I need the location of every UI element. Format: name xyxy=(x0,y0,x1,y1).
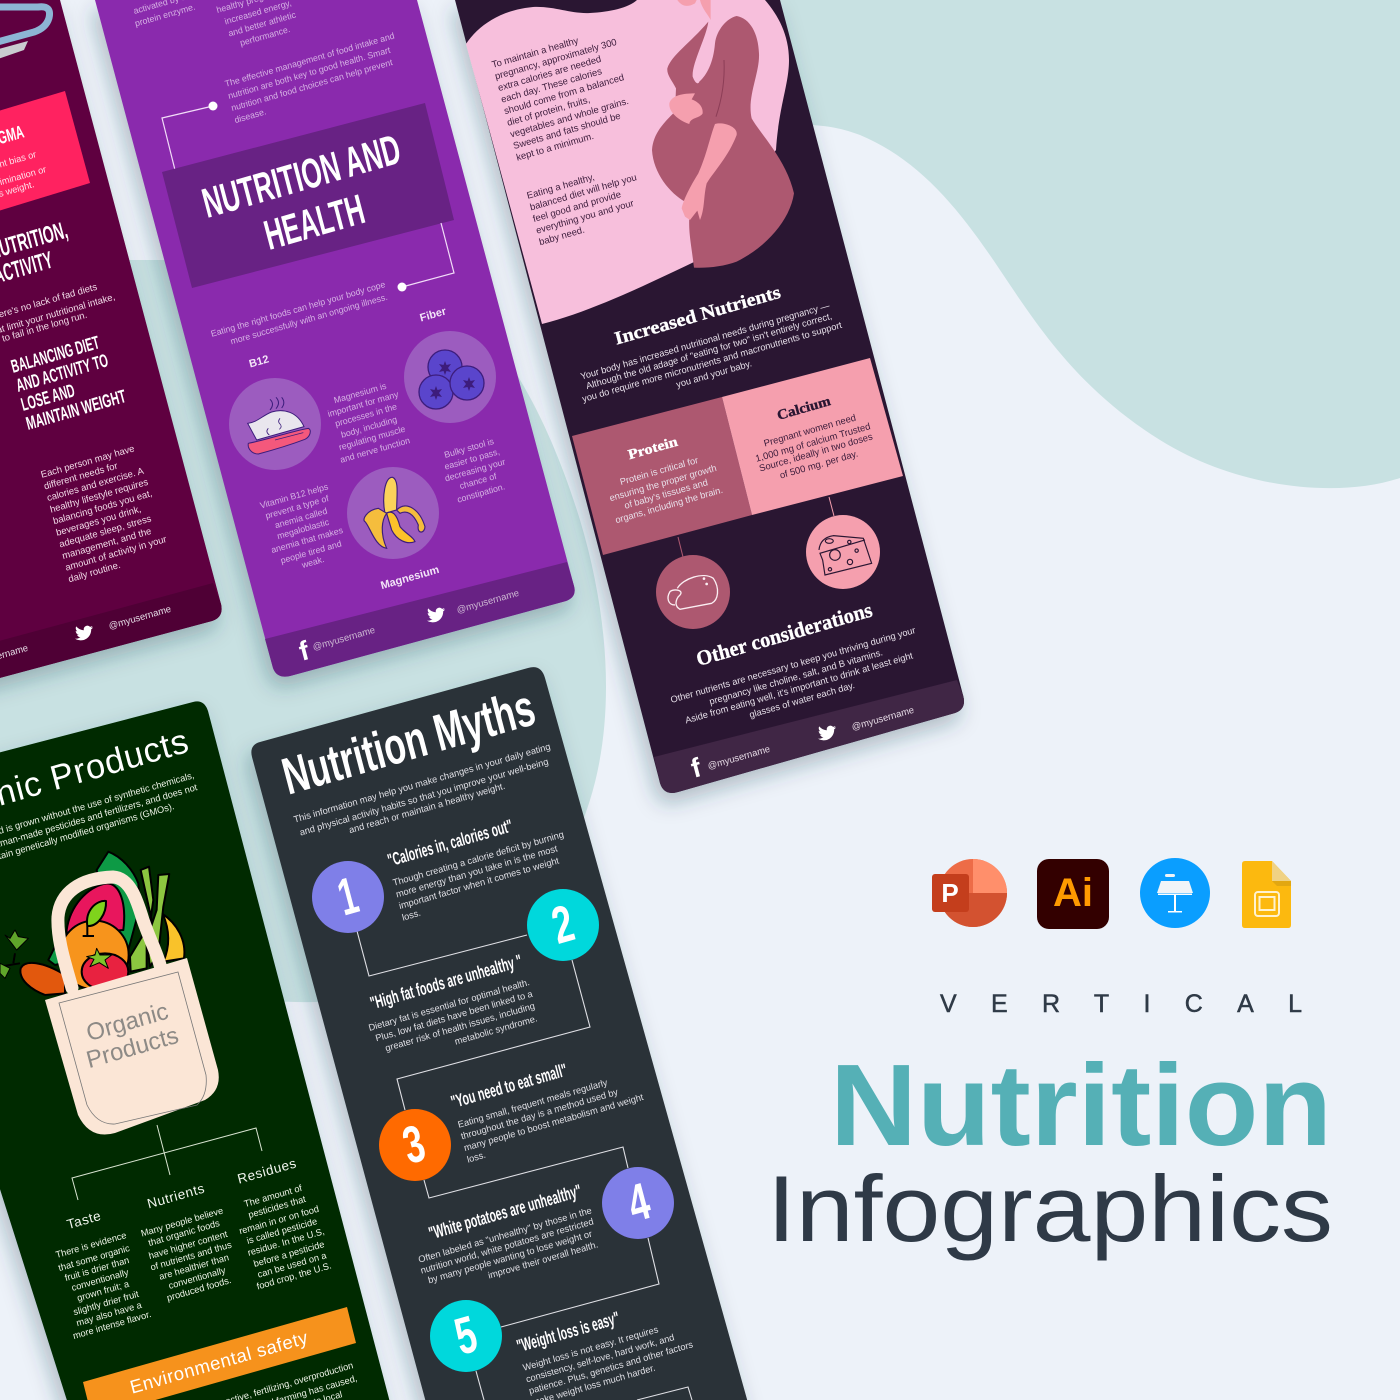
icon: bowl handle xyxy=(0,7,50,60)
myth 4: 4 xyxy=(622,1172,656,1234)
footer band xyxy=(265,562,575,677)
text: balanced diet: feel good and provide xyxy=(532,189,622,225)
myth 5: patience. Plus, genetics and other factors xyxy=(528,1339,694,1396)
text: each person: healthy lifestyle requires xyxy=(49,476,150,515)
title: nutrition and health: NUTRITION AND xyxy=(197,125,405,227)
title: nutrition: Nutrition xyxy=(830,1040,1332,1170)
text: calories: Sweets and fats should be xyxy=(512,110,622,152)
footer handles: @myusername xyxy=(707,744,771,772)
text: effective management: nutrition are both key to good health. Smart xyxy=(227,45,392,101)
panel: calcium: Calcium xyxy=(776,394,833,424)
text: residues xyxy=(238,1183,332,1292)
text: vitamin b12: Vitamin B12 helps xyxy=(259,481,330,511)
panel: calcium: Pregnant women need xyxy=(763,413,857,449)
text: calories: diet of protein, fruits, xyxy=(506,94,591,128)
myth 2: greater risk of health issues, including xyxy=(384,1001,536,1053)
text: fiber: easier to pass, xyxy=(443,446,501,472)
text: fiber: chance of xyxy=(458,471,498,491)
connector top xyxy=(162,102,218,170)
text: vitamin b12: weak. xyxy=(300,554,325,570)
footer handles: f xyxy=(688,752,705,784)
text: taste: fruit is drier than xyxy=(64,1255,130,1283)
icon: banana xyxy=(347,467,439,559)
panel: pink pregnancy card xyxy=(455,0,964,793)
callout: stigma xyxy=(0,91,90,212)
text: calories: kept to a minimum. xyxy=(515,130,595,163)
myth 4: improve their overall health. xyxy=(487,1239,599,1281)
icon: powerpoint: P xyxy=(941,878,959,908)
text: magnesium: regulating muscle xyxy=(338,424,406,452)
footer handles: @myusername xyxy=(108,604,172,632)
labels: B12 xyxy=(248,353,270,371)
text: vitamin b12: people tired and xyxy=(279,538,343,566)
labels: Fiber xyxy=(419,305,448,325)
footer band xyxy=(0,583,222,694)
text: fiber: Bulky stool is xyxy=(443,436,495,460)
bag label: Products xyxy=(84,1022,181,1074)
teal blob: upper right xyxy=(760,0,1400,488)
myth 2 xyxy=(367,889,599,1053)
text: calories: extra calories are needed xyxy=(497,53,602,94)
myth 1: more energy than you take in is the most xyxy=(395,843,559,899)
labels: Magnesium xyxy=(379,564,441,592)
footer band xyxy=(654,680,964,793)
text: intro: This information may help you make changes in your daily eating xyxy=(293,741,551,825)
myth 2: "High fat foods are unhealthy " xyxy=(368,951,524,1013)
icon: poultry xyxy=(656,537,730,629)
banner: environmental safety: Environmental safety xyxy=(128,1326,311,1398)
panel: protein: ensuring the proper growth xyxy=(608,463,718,503)
text: taste: conventionally xyxy=(70,1267,130,1293)
text: eating the right foods: Eating the right foods can help your body cope xyxy=(210,279,386,339)
footer handles xyxy=(688,705,915,784)
text: fiber: constipation. xyxy=(456,481,506,505)
myth 2: Dietary fat is essential for optimal health. xyxy=(367,977,531,1033)
text: taste xyxy=(55,1230,152,1341)
text: effective management: The effective management of food intake and xyxy=(224,31,396,89)
labels xyxy=(248,305,448,592)
myth 3 xyxy=(379,1060,648,1181)
text: magnesium: important for many xyxy=(327,389,400,419)
text: each person: balancing foods you eat, xyxy=(52,488,153,527)
text: nutrients: are healthier than xyxy=(158,1252,230,1282)
myth 3: 3 xyxy=(397,1114,431,1176)
text: balanced diet: Eating a healthy, xyxy=(526,171,596,201)
text: other nutrients: glasses of water each day. xyxy=(748,680,856,720)
text: vitamin b12: anemia called xyxy=(274,506,328,530)
text: magnesium: body, including xyxy=(340,414,398,440)
banner: environmental safety xyxy=(83,1307,356,1400)
text: each person: different needs for xyxy=(43,460,119,492)
text: residues: remain in or on food xyxy=(238,1204,320,1236)
text: nutrients: conventionally xyxy=(167,1265,227,1291)
text: performance xyxy=(215,0,297,48)
text: nutrients xyxy=(140,1205,233,1303)
text: increased nutrients: Although the old adage of "eating for two" isn't entirely correct, xyxy=(585,311,833,391)
heading: balancing diet xyxy=(9,331,128,434)
heading: columns: Taste xyxy=(65,1208,103,1232)
text: calories: vegetables and whole grains. xyxy=(509,95,630,140)
text: effective management: disease. xyxy=(233,106,267,125)
icon: cheese xyxy=(806,497,880,589)
myth 1: Though creating a calorie deficit by burning xyxy=(392,829,565,888)
text: balanced diet: baby need. xyxy=(538,224,586,248)
panel: green organic products card xyxy=(0,701,392,1400)
text: magnesium: and nerve function xyxy=(339,435,411,465)
panel: protein: organs, including the brain. xyxy=(614,485,724,525)
icon: produce bag xyxy=(0,852,219,1135)
text: increased nutrients: Your body has increased nutritional needs during pregnancy — xyxy=(579,300,831,382)
panel: purple nutrition and health card xyxy=(95,0,575,677)
panel: calcium: of 500 mg. per day. xyxy=(779,449,859,481)
text: residues: can be used on a xyxy=(257,1250,328,1280)
text: other nutrients: Other nutrients are necessary to keep you thriving during your xyxy=(670,625,916,705)
text: nutrients: that organic foods xyxy=(147,1218,221,1248)
text: intro: and physical activity habits so that you improve your well-being xyxy=(299,756,549,838)
text: increased nutrients: you do require more micronutrients and macronutrients to support xyxy=(581,320,843,404)
text: vitamin b12: anemia that makes xyxy=(270,525,345,555)
text: magnesium: processes in the xyxy=(334,401,398,429)
connectors xyxy=(357,931,692,1400)
myth 4 xyxy=(417,1167,674,1285)
icon: powerpoint xyxy=(932,859,1007,927)
icon: blueberries xyxy=(404,331,496,423)
heading: balancing diet: AND ACTIVITY TO xyxy=(14,349,110,396)
title: infographics: Infographics xyxy=(767,1156,1333,1261)
heading: columns xyxy=(65,1155,298,1232)
text: each person: calories and exercise. A xyxy=(46,465,145,504)
text: residues: The amount of xyxy=(243,1183,303,1209)
footer handles xyxy=(0,604,172,671)
myth 4: Often labeled as "unhealthy" by those in the xyxy=(417,1205,593,1265)
icon: keynote xyxy=(1140,858,1210,928)
myth 5: consistency, self-love, hard work, and xyxy=(525,1332,675,1384)
bag label: Organic xyxy=(84,998,171,1047)
myth 1: loss. xyxy=(401,908,422,923)
teal blob: lower left xyxy=(0,260,606,1002)
text: calories: To maintain a healthy xyxy=(491,35,580,70)
text: eating the right foods: more successfully with an ongoing illness. xyxy=(229,292,389,346)
illustration: pregnant woman xyxy=(652,0,794,268)
text: nutrients: of nutrients and thus xyxy=(149,1239,233,1272)
text: effective management: nutrition and food choices can help prevent xyxy=(230,57,394,113)
text: balanced diet: everything you and your xyxy=(535,198,635,236)
myth 3: "You need to eat small" xyxy=(449,1060,569,1112)
heading: other considerations: Other considerations xyxy=(694,598,875,671)
myth 5: 5 xyxy=(449,1305,483,1367)
myth 1 xyxy=(312,816,574,933)
text: enzymes: protein enzyme. xyxy=(134,2,196,28)
icon: illustrator: Ai xyxy=(1053,871,1093,915)
text: residues: pesticides that xyxy=(247,1194,307,1220)
panel: maroon weight card xyxy=(0,0,222,694)
panel: protein: of baby's tissues and xyxy=(623,477,709,511)
text: fad diets xyxy=(0,282,116,351)
text: other nutrients: Aside from eating well, it's important to drink at least eight xyxy=(684,650,914,725)
myth 3: Eating small, frequent meals regularly xyxy=(457,1077,609,1130)
text: each person: adequate sleep, stress xyxy=(58,513,153,550)
text: other nutrients: pregnancy like choline, salt, and B vitamins. xyxy=(708,647,884,707)
text: residues: is called pesticide xyxy=(246,1216,318,1246)
text: fiber xyxy=(443,436,506,505)
panel: calcium: Source, ideally in two doses xyxy=(758,431,874,475)
myth 1: "Calories in, calories out" xyxy=(385,816,515,870)
text: performance: and better athletic xyxy=(227,9,297,38)
tree connector xyxy=(72,1125,262,1200)
heading: columns: Nutrients xyxy=(146,1181,206,1211)
text: residues: food crop, the U.S. xyxy=(256,1260,332,1292)
text: fiber: decreasing your xyxy=(444,457,506,483)
myth 2: 2 xyxy=(546,894,580,956)
text: nutrients: have higher content xyxy=(148,1229,229,1261)
text: each person: daily routine. xyxy=(67,559,122,585)
text: magnesium: Magnesium is xyxy=(333,381,388,405)
text: intro: and reach or maintain a healthy weight. xyxy=(348,781,506,835)
myth 5: Weight loss is not easy. It requires xyxy=(522,1324,660,1373)
icon: poultry dish xyxy=(229,378,321,470)
footer handles: @myusername xyxy=(851,705,915,733)
text: performance: performance. xyxy=(239,24,291,48)
text: calories: pregnancy, approximately 300 xyxy=(494,36,618,82)
connector bottom xyxy=(398,223,454,292)
text: taste: may also have a xyxy=(75,1300,144,1328)
text: balanced diet: balanced diet will help you xyxy=(529,172,638,213)
myth 5: "Weight loss is easy" xyxy=(515,1308,621,1356)
myth 1: 1 xyxy=(332,866,364,928)
text: taste: There is evidence xyxy=(55,1230,127,1260)
text: vitamin b12 xyxy=(259,481,345,570)
footer handles xyxy=(296,588,520,667)
bag label xyxy=(84,998,181,1074)
text: magnesium xyxy=(327,381,411,465)
heading: vertical: VERTICAL xyxy=(940,990,1302,1018)
myth 3: many people to boost metabolism and weight xyxy=(463,1092,645,1153)
pink blob xyxy=(466,0,789,324)
text: taste: more intense flavor. xyxy=(72,1309,152,1341)
myth 1: important factor when it comes to weight xyxy=(398,855,560,911)
text: taste: that some organic xyxy=(57,1243,131,1273)
text: each person: Each person may have xyxy=(40,443,136,480)
text: residues: before a pesticide xyxy=(253,1239,325,1269)
panel: dark nutrition myths card xyxy=(251,667,750,1400)
icon: google slides xyxy=(1242,861,1291,928)
heading: nutrition, activity xyxy=(0,217,71,289)
text: each person: management, and the xyxy=(61,525,153,562)
text: increased nutrients: you and your baby. xyxy=(675,358,753,390)
panel: protein: Protein is critical for xyxy=(619,455,699,487)
text: vitamin b12: megaloblastic xyxy=(276,517,331,541)
panel: calcium xyxy=(722,358,903,515)
text: calories: each day. These calories xyxy=(500,66,603,105)
text: residues: residue. In the U.S, xyxy=(247,1226,325,1258)
footer handles: f xyxy=(296,635,313,667)
myth 5 xyxy=(430,1300,697,1400)
footer handles: @myusername xyxy=(456,588,520,616)
footer handles: @myusername xyxy=(312,625,376,653)
heading band xyxy=(162,103,454,288)
title: Nutrition Myths xyxy=(276,679,541,806)
text: nutrients: Many people believe xyxy=(140,1205,224,1239)
heading: columns: Residues xyxy=(236,1155,298,1187)
myth 4: by many people wanting to lose weight or xyxy=(427,1229,593,1285)
myth 4: nutrition world, white potatoes are restricted xyxy=(419,1216,595,1276)
text: taste: grown fruit; a xyxy=(76,1279,131,1303)
title: nutrition and health: HEALTH xyxy=(259,185,369,259)
text: calories: should come from a balanced xyxy=(503,72,625,117)
text: vitamin b12: prevent a type of xyxy=(264,493,330,521)
myth 3: throughout the day is a method used by xyxy=(460,1087,619,1141)
heading: balancing diet: MAINTAIN WEIGHT xyxy=(24,385,128,434)
text: taste: slightly drier fruit xyxy=(72,1289,140,1317)
heading: balancing diet: BALANCING DIET xyxy=(9,331,102,377)
panel: protein xyxy=(572,397,752,555)
heading: balancing diet: LOSE AND xyxy=(19,379,77,415)
myth 2: metabolic syndrome. xyxy=(454,1013,538,1047)
panel: calcium: 1,000 mg of calcium Trusted xyxy=(754,421,872,465)
myth 4: "White potatoes are unhealthy" xyxy=(427,1181,583,1243)
text: nutrients: produced foods. xyxy=(166,1275,232,1303)
text: each person: amount of activity in your xyxy=(64,534,168,573)
heading: increased nutrients: Increased Nutrients xyxy=(612,282,783,349)
panel: protein: Protein xyxy=(627,435,680,463)
myth 2: Plus, low fat diets have been linked to a xyxy=(374,988,534,1043)
title: nutrition and health xyxy=(197,125,405,259)
myth 3: loss. xyxy=(466,1150,487,1165)
icon: illustrator xyxy=(1037,859,1109,929)
text: each person: beverages you drink, xyxy=(55,503,142,538)
